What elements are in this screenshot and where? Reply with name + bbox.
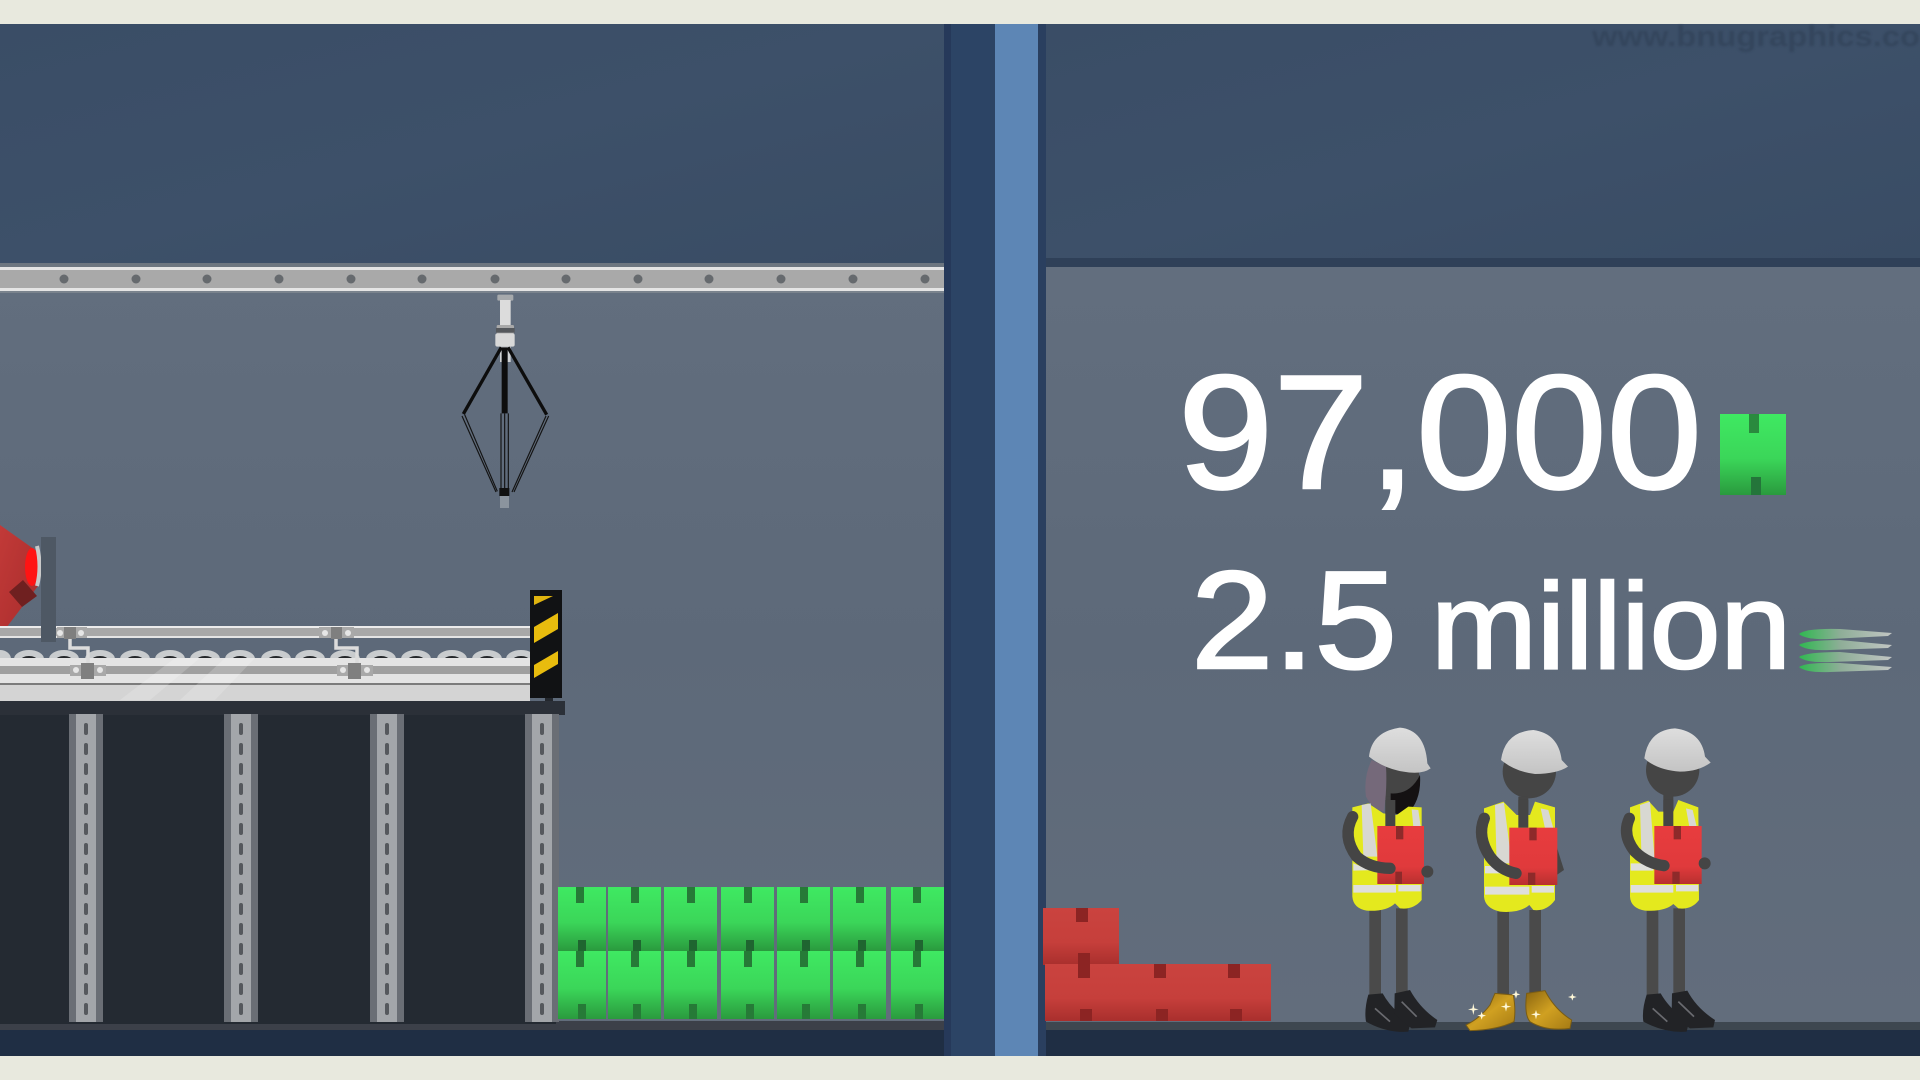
head <box>1503 745 1556 798</box>
leg holes <box>86 725 542 1015</box>
legs <box>1369 908 1408 995</box>
neck over vest <box>1385 800 1395 826</box>
sparkles <box>1468 990 1577 1020</box>
figure: 2.5 million <box>1191 543 1791 698</box>
gold boots <box>1466 991 1572 1031</box>
neck over vest <box>1663 800 1673 826</box>
icon: green box <box>1720 414 1786 495</box>
helmet <box>1501 730 1568 774</box>
panel: dividing column <box>944 24 1046 1056</box>
rollers <box>0 650 536 668</box>
boots <box>1365 990 1437 1032</box>
worker 3 <box>1627 728 1715 1032</box>
left lower wall <box>0 264 944 1024</box>
left floor <box>0 1021 944 1056</box>
brackets <box>57 627 373 679</box>
conveyor body <box>0 658 530 701</box>
hair <box>1365 760 1420 815</box>
arm <box>1348 817 1390 868</box>
box tapes <box>576 887 923 1019</box>
arm <box>1482 818 1516 873</box>
worker 2 <box>1466 730 1577 1031</box>
hazard post <box>530 590 562 720</box>
panel: left factory room <box>0 24 944 1056</box>
worker 1 <box>1348 728 1437 1032</box>
right lower wall <box>1046 267 1920 1024</box>
robot claw <box>462 295 549 508</box>
overhead rail <box>0 263 944 293</box>
figure: 97,000: 97,000 <box>1178 342 1702 523</box>
panel: right room <box>1046 24 1920 1056</box>
green box stack <box>558 887 944 1019</box>
red box stack <box>1043 908 1271 1021</box>
held box <box>1509 828 1557 885</box>
conveyor upper guard rail <box>0 626 530 638</box>
legs <box>1497 910 1541 995</box>
head <box>1371 753 1419 801</box>
helmet <box>1644 728 1711 772</box>
vest <box>1484 802 1555 912</box>
boots <box>1643 991 1715 1032</box>
right upper wall <box>1046 24 1920 260</box>
vest <box>1352 803 1422 911</box>
figure: 2.5 million: 2.5 <box>1191 543 1397 698</box>
neck over vest <box>1518 800 1528 828</box>
held box <box>1654 826 1702 884</box>
left upper wall <box>0 24 944 264</box>
held box <box>1377 826 1424 884</box>
stand legs <box>69 714 559 1022</box>
red machine <box>0 525 56 642</box>
legs <box>1647 908 1685 995</box>
vest <box>1630 800 1699 911</box>
helmet <box>1369 728 1431 773</box>
right floor <box>1046 1022 1920 1056</box>
conveyor stand <box>0 701 565 1024</box>
arm <box>1627 818 1664 866</box>
figure: 2.5 million: million <box>1431 558 1791 694</box>
head <box>1646 743 1699 797</box>
faint watermark: www.bnugraphics.co <box>1591 21 1920 53</box>
conveyor <box>0 626 536 701</box>
icon: stack of flattened boxes <box>1799 629 1892 672</box>
